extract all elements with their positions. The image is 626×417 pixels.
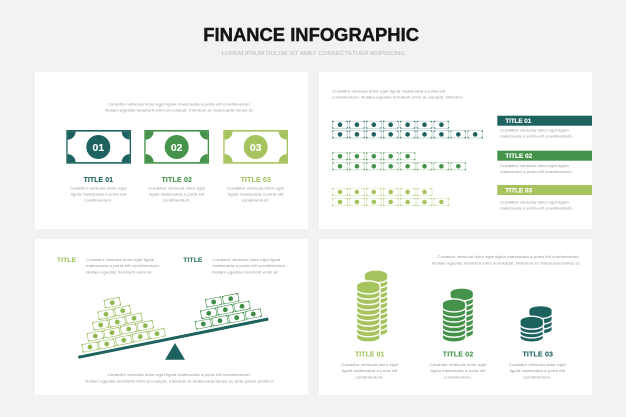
icon: banknote 01: [66, 130, 131, 164]
text: bar 01 body: malesuada a porta elit condimentum.: [500, 134, 573, 138]
title bar 01: TITLE 01: [505, 118, 532, 125]
text: title 01 body: [70, 185, 128, 203]
title bar 01: [497, 116, 592, 126]
text: coin title 03 body: condimentum.: [523, 374, 551, 379]
icon: right money pile: [195, 293, 262, 330]
text: title 03 body: Curabitur vehicula dolor eget: [227, 185, 285, 190]
icon: left money pile: [81, 297, 166, 353]
icon: banknote 03: [223, 130, 288, 164]
text: coin title 01 body: condimentum.: [356, 374, 384, 379]
icon: banknote 01: 01: [92, 142, 104, 154]
panel: banknotes: [35, 72, 308, 229]
text: coin title 03 body: [509, 362, 567, 379]
panel 4 intro text: Nullam egestas hendrerit enim at volutpat. Interdum et malesuada fames ac: [432, 260, 580, 265]
text: coin title 02 body: condimentum.: [444, 374, 472, 379]
text: title 02 body: condimentum.: [163, 198, 191, 203]
panel 1 intro text: [105, 101, 253, 112]
text: right body: malesuada a porta elit condimentum.: [212, 263, 286, 268]
text: coin title 01 body: Curabitur vehicula dolor eget: [341, 362, 399, 367]
scale beam: [78, 319, 268, 357]
text: title 02 body: Curabitur vehicula dolor eget: [148, 185, 206, 190]
text: left body: [86, 257, 160, 274]
text: coin title 03 body: ligula malesuada a porta elit: [510, 368, 566, 373]
panel 1 intro text: Curabitur vehicula dolor eget ligula malesuada a porta elit condimentum.: [108, 101, 251, 106]
icon: banknote 03: 03: [250, 142, 262, 154]
text: coin title 02 body: [430, 362, 487, 379]
text: coin title 01 body: ligula malesuada a porta elit: [342, 368, 398, 373]
text: coin title 02 body: Curabitur vehicula dolor eget: [430, 362, 487, 367]
text: title 03 body: condimentum.: [242, 198, 270, 203]
title bar 02: [497, 151, 592, 161]
icon: banknote 02: [144, 130, 209, 164]
text: bar 01 body: Curabitur vehicula dolor eget ligula: [500, 127, 570, 132]
text: title 03 body: [227, 185, 285, 203]
text: bar 02 body: [500, 163, 573, 174]
icon: dark coin stack: [520, 306, 552, 342]
text: bottom caption: Nullam egestas hendrerit enim at volutpat. Interdum et malesuada fames ac ante ipsum primis in: [85, 378, 274, 383]
panel 4 intro text: Curabitur vehicula dolor eget ligula malesuada a porta elit condimentum.: [437, 254, 580, 259]
title bar 03: TITLE 03: [505, 188, 533, 194]
panel: coin stacks: [319, 239, 592, 395]
text: bar 03 body: Curabitur vehicula dolor eget ligula: [500, 199, 570, 204]
heading: right title: TITLE: [183, 257, 203, 264]
text: bottom caption: Curabitur vehicula dolor eget ligula malesuada a porta elit condimentum.: [108, 372, 251, 377]
text: bar 03 body: malesuada a porta elit condimentum.: [500, 205, 573, 210]
text: bar 02 body: Curabitur vehicula dolor eget ligula: [500, 163, 570, 168]
text: title 01 body: condimentum.: [84, 198, 112, 203]
title bar 02: TITLE 02: [505, 153, 533, 160]
heading: coin title 02: TITLE 02: [443, 352, 473, 358]
text: title 03 body: ligula malesuada a porta elit: [228, 191, 284, 196]
panel: banknote rows: [319, 72, 592, 229]
heading: title 01: TITLE 01: [84, 177, 113, 184]
heading: left title: TITLE: [57, 257, 77, 264]
text: bar 02 body: malesuada a porta elit condimentum.: [500, 169, 573, 174]
text: coin title 03 body: Curabitur vehicula dolor eget: [509, 362, 567, 367]
icon: mid green coin stack: [442, 288, 474, 342]
panel 2 intro text: [332, 89, 464, 100]
heading: title 02: TITLE 02: [161, 177, 192, 184]
chart: light green banknote rows: [332, 188, 449, 206]
panel 4 intro text: [432, 254, 580, 265]
text: coin title 01 body: [341, 362, 399, 379]
text: bar 03 body: [500, 199, 573, 210]
panel 2 intro text: condimentum. Nullam egestas hendrerit enim at volutpat. Interdum: [332, 95, 464, 100]
title bar 03: [497, 185, 592, 195]
icon: light coin stack: [356, 270, 388, 342]
heading: title 03: TITLE 03: [240, 177, 271, 184]
title: FINANCE INFOGRAPHIC: [203, 25, 419, 45]
subtitle: LOREM IPSUM DOLOR SIT AMET CONSECTETUER ADIPISCING: [222, 51, 405, 57]
scale fulcrum: [165, 343, 185, 360]
text: bar 01 body: [500, 127, 573, 138]
panel 2 intro text: Curabitur vehicula dolor eget ligula malesuada a porta elit: [332, 89, 446, 94]
text: right body: [212, 257, 286, 274]
text: title 02 body: [148, 185, 206, 203]
heading: coin title 01: TITLE 01: [355, 352, 385, 358]
chart: dark banknote rows: [332, 121, 483, 138]
text: right body: Nullam egestas hendrerit enim at: [212, 269, 278, 274]
text: title 01 body: Curabitur vehicula dolor eget: [70, 185, 128, 190]
text: right body: Curabitur vehicula dolor eget ligula: [212, 257, 281, 262]
text: left body: malesuada a porta elit condimentum.: [86, 263, 160, 268]
text: left body: Nullam egestas hendrerit enim at: [86, 269, 152, 274]
icon: banknote 02: 02: [171, 142, 183, 154]
text: left body: Curabitur vehicula dolor eget ligula: [86, 257, 155, 262]
chart: mid green banknote rows: [332, 152, 466, 170]
panel 1 intro text: Nullam egestas hendrerit enim at volutpat. Interdum et malesuada fames ac: [105, 108, 253, 112]
text: title 01 body: ligula malesuada a porta elit: [71, 191, 127, 196]
panel: balance scale: [35, 239, 308, 395]
text: bottom caption: [85, 372, 274, 383]
text: coin title 02 body: ligula malesuada a porta elit: [430, 368, 486, 373]
text: title 02 body: ligula malesuada a porta elit: [149, 191, 205, 196]
heading: coin title 03: TITLE 03: [522, 352, 553, 358]
